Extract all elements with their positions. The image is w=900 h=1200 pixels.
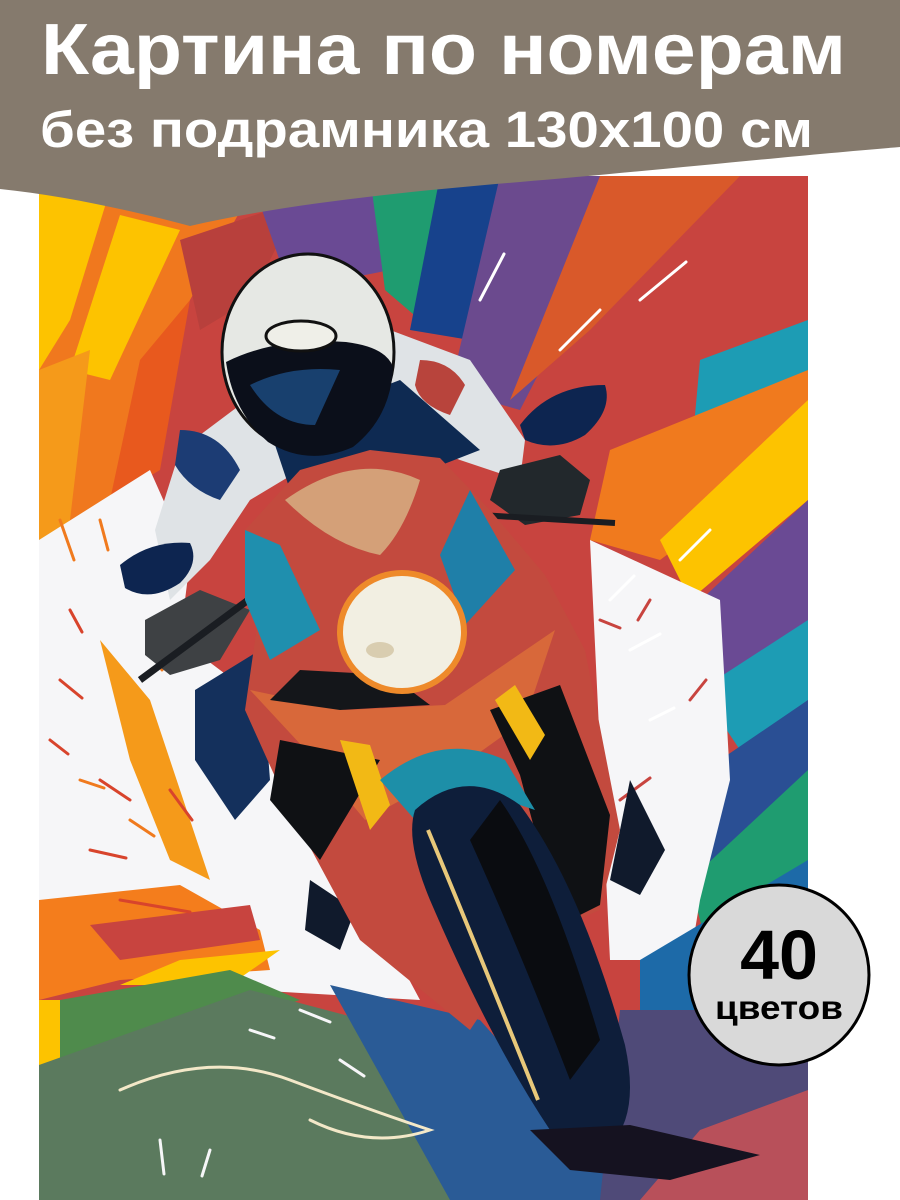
front wheel <box>412 786 760 1180</box>
painting: motorcyclist <box>39 176 808 1200</box>
subtitle: без подрамника 130х100 см <box>40 101 813 158</box>
badge: 40 colours: 40 <box>740 916 818 994</box>
mirror and right glove <box>480 385 615 525</box>
mirror and left glove <box>120 543 255 680</box>
rider body <box>155 330 665 950</box>
badge: 40 colours <box>689 885 869 1065</box>
motorcycle fairing <box>245 450 620 1030</box>
headlight <box>340 573 464 691</box>
badge: 40 colours: цветов <box>715 989 843 1026</box>
paint splashes <box>50 254 710 1176</box>
painting background strokes <box>39 176 808 1200</box>
title: Картина по номерам <box>41 10 846 90</box>
helmet <box>222 254 394 456</box>
top banner <box>0 0 900 226</box>
